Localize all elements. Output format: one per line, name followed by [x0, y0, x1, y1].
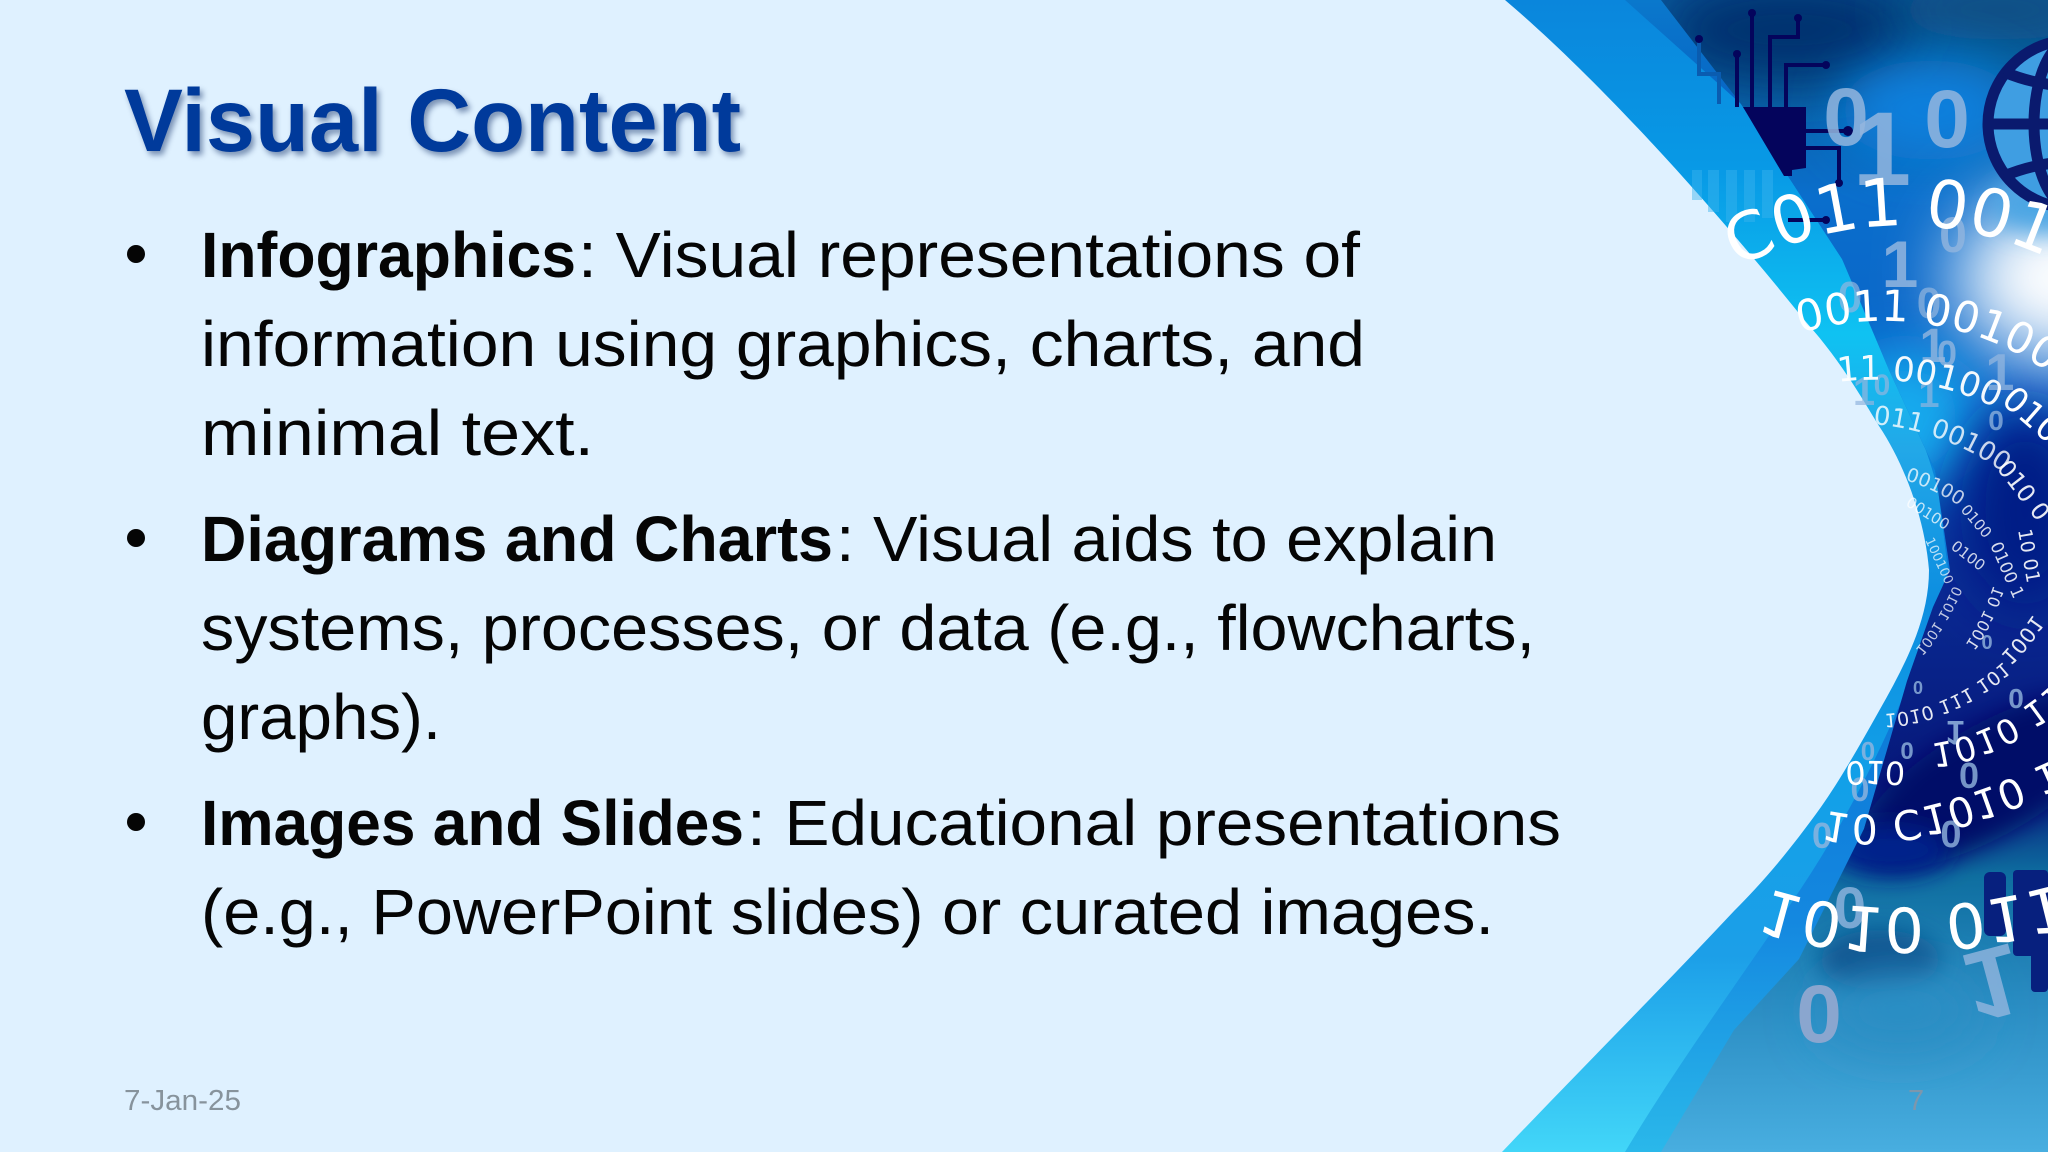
ghost binary digits: 1: [1946, 713, 1964, 751]
curved binary text: lower flipped rings: 1001 01: [1966, 586, 2004, 650]
ghost binary digits: 0: [2008, 683, 2024, 714]
faint chip pins: [1692, 170, 1773, 222]
curved binary text: upper rings: 0100 1: [1992, 542, 2024, 598]
footer date: 7-Jan-25: [124, 1085, 241, 1117]
ghost binary digits: 0: [1851, 771, 1869, 809]
ghost binary digits: 0: [1924, 74, 1970, 165]
ghost binary digits: 0: [1937, 333, 1957, 374]
ghost binary digits: [1796, 72, 2034, 1060]
curved binary text: lower flipped rings: 010: [1847, 760, 1904, 786]
ghost binary digits: 0: [1874, 369, 1890, 402]
ghost binary digits: 0: [1981, 632, 1993, 654]
ghost binary digits: 0: [1796, 969, 1842, 1060]
outer light blue curved band: [1502, 0, 2048, 1152]
curved binary text: upper rings: 011 00100: [1876, 406, 2010, 469]
page number: 7: [1908, 1085, 1924, 1117]
icon: globe: [1988, 40, 2048, 208]
curved binary text: upper rings: 0100: [1952, 541, 1985, 570]
curved binary text: upper rings: 100100: [1926, 538, 1954, 584]
ghost binary digits: 0: [1959, 755, 1979, 796]
bullet: diagrams and charts: [127, 503, 1535, 753]
curved binary text: lower flipped rings: 10 C1010 11: [1826, 762, 2048, 845]
ghost binary digits: 0: [1834, 876, 1866, 941]
ghost binary digits: 0: [1823, 72, 1869, 163]
inner blue curved band: [1625, 0, 2048, 1152]
ghost binary digits: 1: [1920, 320, 1946, 373]
curved binary text: upper rings: 00100: [1908, 468, 1964, 504]
ghost binary digits: 1: [1986, 344, 2014, 402]
title: Visual Content: [124, 70, 741, 170]
bullet: diagrams and charts: : Visual aids to explain: [836, 503, 1497, 575]
ghost binary digits: 1: [1853, 91, 1911, 208]
curved binary text: upper rings: 10 01: [2018, 530, 2040, 582]
bullet: infographics: information using graphics, charts, and: [201, 308, 1365, 380]
bullet: images and slides: Images and Slides: [201, 787, 744, 859]
bullet: diagrams and charts: systems, processes, or data (e.g., flowcharts,: [201, 592, 1535, 664]
ghost binary digits: 1: [1951, 922, 2034, 1044]
ghost binary digits: 0: [1838, 273, 1862, 322]
ghost binary digits: 1: [1918, 374, 1940, 416]
ghost binary digits: 0: [1861, 736, 1875, 766]
curved binary text: lower flipped rings: 1001 1: [2002, 616, 2043, 664]
curved binary text: upper rings: 00100: [1907, 498, 1949, 528]
bullet: diagrams and charts: graphs).: [201, 681, 441, 753]
bullet: infographics: minimal text.: [201, 397, 594, 469]
curved binary text: upper rings: [144, 178, 2048, 642]
icon: dark chip fragments: [1984, 870, 2048, 992]
ghost binary digits: 0: [1913, 678, 1923, 698]
bullet: images and slides: : Educational presentations: [747, 787, 1561, 859]
curved binary text: lower flipped rings: 1010 110: [1934, 688, 2048, 767]
ghost binary digits: 0: [1988, 405, 2004, 436]
curved binary text: lower flipped rings: [1763, 586, 2048, 954]
icon: circuit chip: [1695, 9, 1853, 224]
curved binary text: upper rings: 11 00100: [1840, 355, 2001, 405]
curved binary text: lower flipped rings: 1010 111 1011: [1886, 662, 2009, 728]
ghost binary digits: 0: [1940, 814, 1962, 856]
ghost binary digits: 0: [1939, 207, 1967, 263]
bullet: images and slides: (e.g., PowerPoint slides) or curated images.: [201, 876, 1494, 948]
bullet: infographics: : Visual representations of: [578, 219, 1360, 291]
curved binary text: lower flipped rings: 1010 0110: [1763, 887, 2048, 954]
ghost binary digits: 0: [1900, 738, 1914, 765]
bullet: diagrams and charts: Diagrams and Charts: [201, 503, 833, 575]
curved binary text: upper rings: 0100: [1962, 505, 1991, 537]
ghost binary digits: 0: [1812, 815, 1832, 856]
ghost binary digits: 1: [1882, 227, 1918, 301]
panel: decorative technology artwork: [1502, 0, 2048, 1152]
bullet: infographics: [127, 219, 1365, 469]
curved binary text: lower flipped rings: 1001 1010: [1916, 587, 1962, 655]
bullet: images and slides: [127, 787, 1561, 948]
ghost binary digits: 0: [1917, 279, 1941, 328]
digital background image: [1661, 0, 2048, 1152]
bullet: infographics: Infographics: [201, 219, 576, 291]
ghost binary digits: 1: [1853, 370, 1875, 414]
